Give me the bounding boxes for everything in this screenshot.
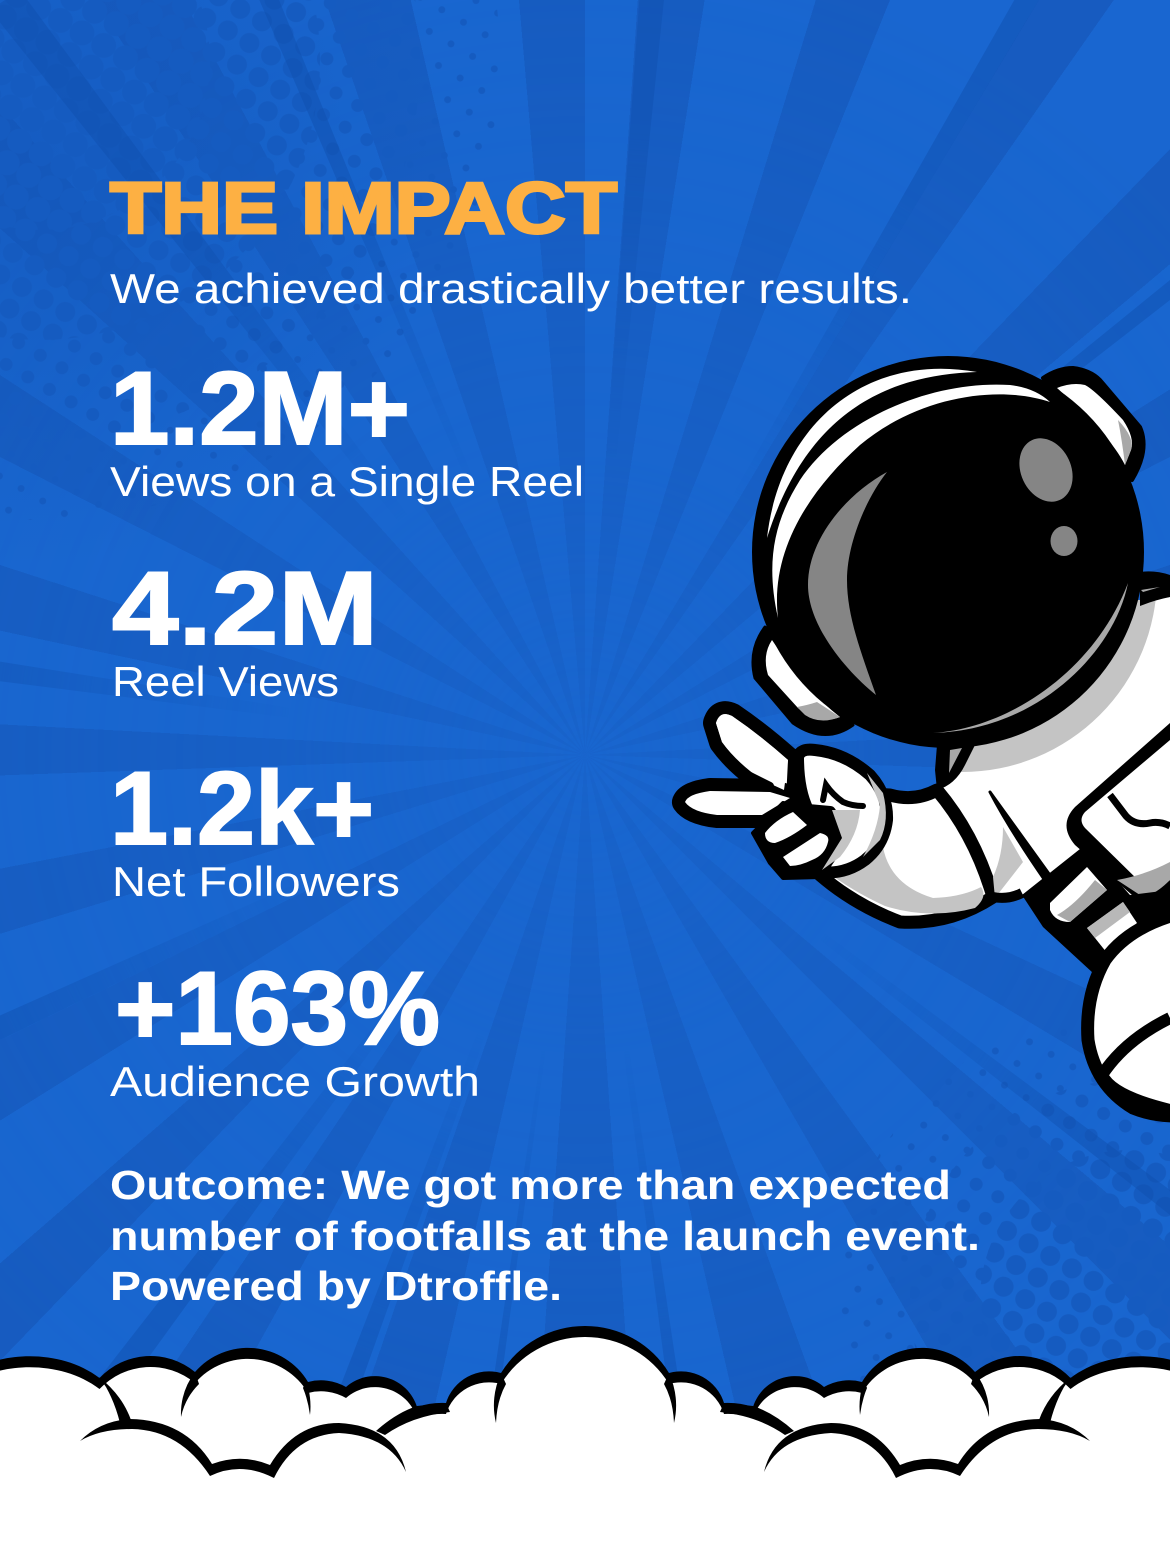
- stat label: Net Followers: [112, 858, 400, 905]
- clouds: [0, 1326, 1170, 1560]
- visor highlight large: [1009, 430, 1083, 510]
- helmet inner rim highlight: [772, 385, 1050, 618]
- lower fingers backing: [753, 803, 843, 878]
- backpack shade: [1117, 862, 1170, 897]
- stat value: 1.2k+: [110, 751, 374, 867]
- stat label: Audience Growth: [110, 1058, 480, 1105]
- helmet outer rim highlight: [767, 369, 977, 538]
- lower finger one: [765, 812, 807, 843]
- outcome text: number of footfalls at the launch event.: [110, 1213, 980, 1259]
- visor reflection: [808, 472, 887, 695]
- finger divider: [742, 772, 770, 786]
- corner shade: [0, 0, 500, 600]
- arm shade: [825, 847, 983, 914]
- arm: [800, 790, 993, 922]
- index finger: [716, 714, 788, 800]
- torso base outline: [993, 893, 1022, 898]
- halftone dots top left: [0, 0, 500, 520]
- stat value: +163%: [115, 951, 440, 1067]
- backpack strap: [1110, 795, 1170, 826]
- stat: audience growth: [110, 951, 480, 1105]
- visor highlight small: [1050, 526, 1078, 556]
- stat: reel views: [112, 551, 378, 705]
- fist shade: [822, 810, 860, 870]
- ear top right: [1043, 368, 1144, 480]
- helmet lower rim reflection: [933, 583, 1128, 733]
- stat: net followers: [110, 751, 400, 905]
- halftone dots bottom right: [840, 1010, 1170, 1560]
- helmet: [752, 356, 1144, 748]
- middle finger: [685, 791, 790, 815]
- subtitle: We achieved drastically better results.: [110, 265, 912, 312]
- waist belt: [1022, 845, 1170, 973]
- outcome text: Powered by Dtroffle.: [110, 1263, 562, 1309]
- backpack outline: [1066, 723, 1170, 903]
- thumb line: [823, 785, 863, 806]
- torso shade: [993, 827, 1023, 898]
- stat: views on a single reel: [110, 351, 584, 505]
- ear lower left: [753, 627, 853, 735]
- lower finger two: [783, 833, 828, 866]
- stat value: 1.2M+: [110, 351, 410, 467]
- leg: [1088, 912, 1170, 1116]
- stat label: Reel Views: [112, 658, 339, 705]
- astronaut body: [940, 597, 1170, 960]
- stat value: 4.2M: [112, 551, 378, 667]
- title: THE IMPACT: [110, 169, 617, 249]
- outcome text: Outcome: We got more than expected: [110, 1162, 951, 1208]
- helmet cast shadow: [961, 600, 1156, 772]
- torso line: [990, 792, 1052, 882]
- collar: [935, 745, 975, 790]
- body outline stripe right: [1140, 571, 1170, 606]
- stat label: Views on a Single Reel: [110, 458, 584, 505]
- outcome text: [110, 1162, 980, 1309]
- astronaut illustration: [685, 356, 1170, 1116]
- index finger redraw: [716, 714, 788, 790]
- boot cuff line: [1102, 1018, 1170, 1110]
- fist: [798, 750, 887, 872]
